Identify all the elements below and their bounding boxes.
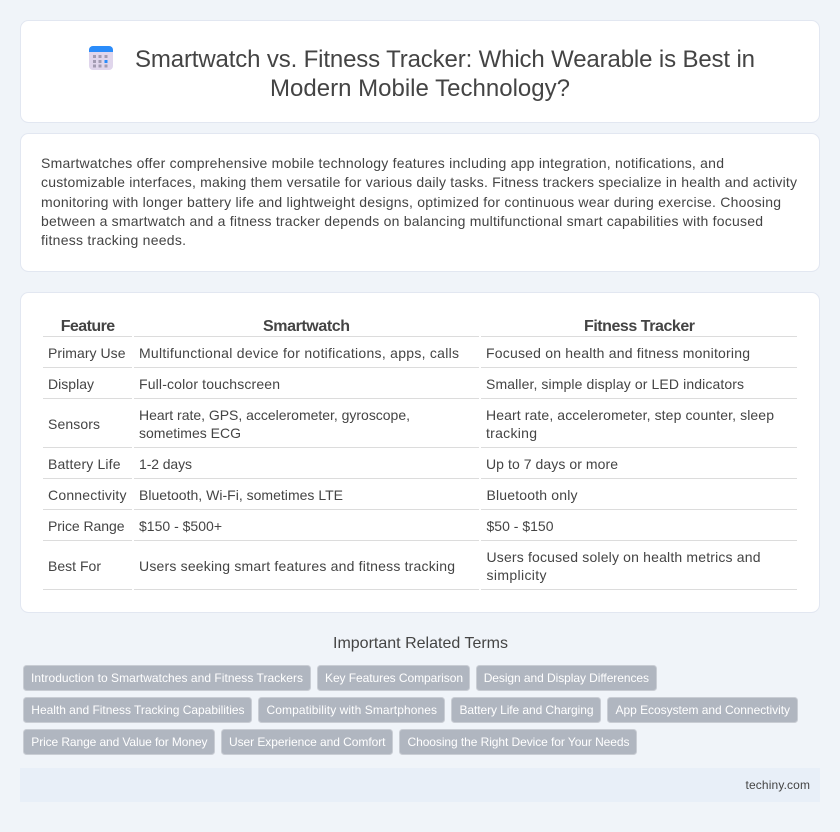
heading: related terms: Important Related Terms [333,635,508,652]
tag [24,730,214,754]
row: battery life [48,456,618,472]
row: display [48,376,744,392]
row: primary use: Focused on health and fitness monitoring [486,345,750,361]
row: connectivity [48,487,578,503]
table header row: Smartwatch [263,318,350,335]
row: best for [48,549,760,583]
row: primary use: Primary Use [48,345,126,361]
panel: header [20,20,820,122]
tag [258,698,444,722]
panel: summary text: monitoring with longer battery life and lightweight designs, optimized for continuous wear during exercise. Choosing [41,194,781,210]
tag [24,698,252,722]
tag [608,698,798,722]
row: primary use [48,345,750,361]
row: best for: simplicity [486,567,546,583]
row: sensors [48,407,774,441]
tag [476,666,656,690]
row: sensors: tracking [486,425,537,441]
row: sensors: Sensors [48,416,100,432]
tag [400,730,636,754]
row: connectivity: Connectivity [48,487,126,503]
row: battery life: Battery Life [48,456,121,472]
tag: Key Features Comparison [325,671,463,685]
row: price range: Price Range [48,518,125,534]
row: primary use: Multifunctional device for notifications, apps, calls [139,345,459,361]
row: battery life: Up to 7 days or more [486,456,618,472]
row: best for: Users focused solely on health metrics and [486,549,760,565]
tag: Introduction to Smartwatches and Fitness Trackers [31,671,303,685]
panel: summary text: customizable interfaces, making them versatile for various daily tasks. Fitness trackers specialize in health and activity [41,174,797,190]
tag [24,666,310,690]
tag [222,730,392,754]
title [135,46,755,102]
row: best for: Best For [48,558,101,574]
row: best for: Users seeking smart features and fitness tracking [139,558,455,574]
tag: App Ecosystem and Connectivity [616,703,790,717]
title: Modern Mobile Technology? [270,75,570,102]
table header row: Feature [61,318,115,335]
row: display: Smaller, simple display or LED indicators [486,376,744,392]
tag: Health and Fitness Tracking Capabilities [31,703,244,717]
title: Smartwatch vs. Fitness Tracker: Which Wearable is Best in [135,46,755,73]
table header row [61,318,695,335]
row: display: Display [48,376,94,392]
panel: comparison table [20,292,820,612]
tag: Price Range and Value for Money [31,735,207,749]
tag: Battery Life and Charging [460,703,594,717]
tag: Choosing the Right Device for Your Needs [408,735,630,749]
row: price range: $50 - $150 [486,518,554,534]
panel: summary text [20,134,820,272]
row: sensors: Heart rate, GPS, accelerometer, gyroscope, [139,407,410,423]
row: connectivity: Bluetooth only [486,487,578,503]
row: sensors: sometimes ECG [139,425,241,441]
tag: Compatibility with Smartphones [266,703,437,717]
tag: Design and Display Differences [484,671,649,685]
footer: techiny.com [746,778,810,792]
row: sensors: Heart rate, accelerometer, step counter, sleep [486,407,774,423]
panel: summary text: between a smartwatch and a fitness tracker depends on balancing multifunctional smart capabilities with focused [41,213,763,229]
icon: calendar app [89,46,113,70]
row: display: Full-color touchscreen [139,376,280,392]
row: price range: $150 - $500+ [139,518,222,534]
panel: summary text: fitness tracking needs. [41,232,186,248]
row: battery life: 1-2 days [139,456,192,472]
tag [452,698,600,722]
tags: related terms [24,666,798,754]
tag [318,666,470,690]
tag: User Experience and Comfort [229,735,386,749]
row: price range [48,518,554,534]
table header row: Fitness Tracker [584,318,695,335]
panel: summary text: Smartwatches offer comprehensive mobile technology features including app integration, notifications, and [41,155,724,171]
row: connectivity: Bluetooth, Wi-Fi, sometimes LTE [139,487,343,503]
footer [20,768,820,802]
